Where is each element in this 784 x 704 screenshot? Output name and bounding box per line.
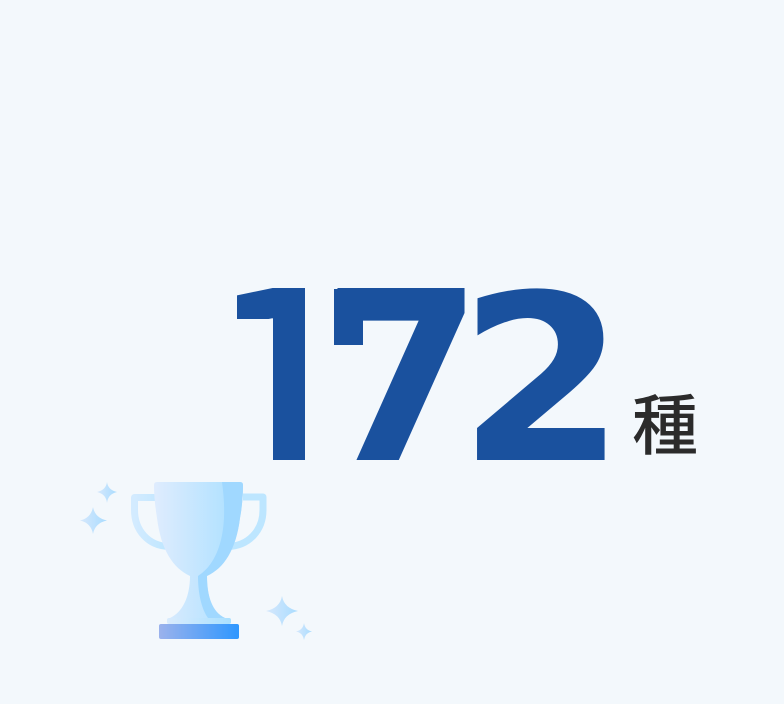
icon: sparkles left [80, 482, 117, 534]
number: 172: 1 [206, 241, 370, 516]
number: 172 [237, 288, 605, 460]
number: 172: 2 [458, 245, 625, 515]
icon: sparkles right [266, 596, 312, 640]
icon: trophy [134, 482, 263, 639]
number: 172: 7 [322, 242, 483, 517]
unit label: 種: 種 [632, 389, 698, 463]
